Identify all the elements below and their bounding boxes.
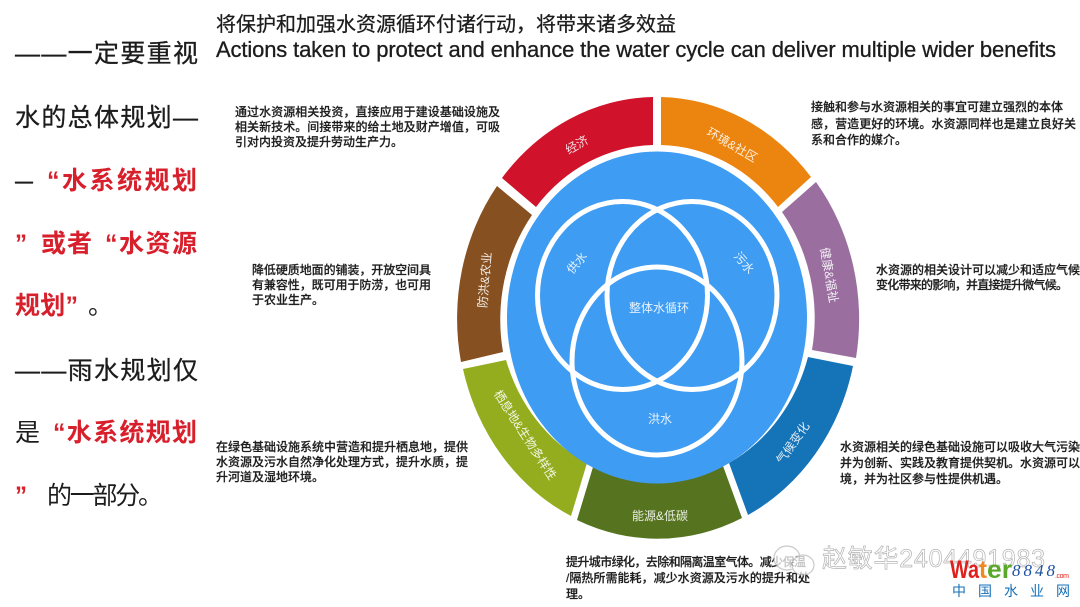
logo: water8848: t [979, 556, 988, 584]
text block: habitat and biodiversity: 在绿色基础设施系统中营造和提升栖息地，提供 [216, 439, 468, 454]
text block: habitat and biodiversity [216, 439, 468, 484]
text block: economy: 相关新技术。间接带来的给土地及财产增值，可吸 [235, 119, 500, 134]
watermark: wechat icon and account: 赵敏华2404491983 [822, 545, 1045, 573]
logo: water8848: 8848 [1012, 561, 1056, 580]
text block: health and wellbeing: 水资源的相关设计可以减少和适应气候 [876, 262, 1080, 277]
text block: economy: 引对内投资及提升劳动生产力。 [235, 134, 403, 149]
text block: health and wellbeing [876, 262, 1080, 292]
segment: flood and agriculture: 防洪&农业 [475, 251, 494, 309]
left text block: water system planning note: 水的总体规划— [15, 104, 198, 132]
left text block: water system planning note: 。 [88, 292, 113, 320]
left text block: water system planning note: ” [15, 230, 27, 258]
text block: economy [235, 104, 500, 149]
title [216, 13, 1056, 62]
left text block: water system planning note: 或者 [41, 230, 92, 258]
left text block: water system planning note: 规划” [15, 292, 78, 320]
segment: economy: 经济 [563, 132, 591, 157]
text block: energy and low carbon [566, 554, 810, 601]
logo: water8848: er [987, 556, 1012, 584]
logo: water8848: 中国水业网 [952, 583, 1070, 599]
centre label: 整体水循环 [629, 300, 689, 315]
segment: environment and community: 环境&社区 [704, 124, 760, 165]
segment: environment and community [661, 97, 811, 207]
segment: economy [502, 97, 653, 207]
venn circle: flooding [572, 267, 742, 455]
text block: flood and agriculture: 于农业生产。 [252, 293, 324, 307]
outer ring of benefits [457, 97, 859, 539]
text block: energy and low carbon: /隔热所需能耗，减少水资源及污水的提升和处 [566, 570, 810, 585]
text block: environment and community: 感，营造更好的环境。水资源同样也是建立良好关 [811, 116, 1076, 131]
segment: flood and agriculture [457, 186, 532, 362]
text block: flood and agriculture: 有兼容性，既可用于防涝，也可用 [252, 277, 431, 292]
segment: climate change [729, 357, 853, 515]
inner circle: integrated water cycle venn [507, 152, 807, 484]
text block: environment and community: 接触和参与水资源相关的事宜可建立强烈的本体 [811, 99, 1063, 114]
venn circle: flooding: 洪水 [648, 412, 672, 426]
logo: water8848 [950, 556, 1070, 599]
text block: environment and community: 系和合作的媒介。 [811, 132, 907, 147]
text block: flood and agriculture [252, 262, 431, 307]
text block: flood and agriculture: 降低硬质地面的铺装，开放空间具 [252, 262, 431, 277]
text block: habitat and biodiversity: 升河道及湿地环境。 [216, 469, 324, 484]
left text block: water system planning note: 的一部分。 [47, 482, 163, 510]
left text block: water system planning note: — [15, 167, 33, 195]
left text block: water system planning note: “水系统规划 [47, 167, 197, 195]
left text block: water system planning note: 是 [15, 419, 40, 447]
left text block: water system planning note: “水资源 [105, 230, 197, 258]
logo: water8848: Wa [950, 556, 980, 584]
title: Actions taken to protect and enhance the water cycle can deliver multiple wider benefits [216, 37, 1056, 62]
logo: water8848: .com [1055, 573, 1069, 580]
venn circle: wastewater: 污水 [731, 249, 757, 277]
text block: energy and low carbon: 提升城市绿化，去除和隔离温室气体。减少保温 [566, 554, 806, 569]
text block: climate change: 境，并为社区参与性提供机遇。 [840, 471, 1008, 486]
left text block: water system planning note: ” [15, 482, 27, 510]
text block: environment and community [811, 99, 1076, 147]
venn circle: water supply: 供水 [564, 249, 590, 277]
text block: health and wellbeing: 变化带来的影响，并直接提升微气候。 [876, 277, 1068, 292]
left text block: water system planning note: ——雨水规划仅 [15, 357, 198, 385]
segment: health and wellbeing: 健康&福祉 [817, 246, 842, 304]
venn circle: wastewater [607, 202, 777, 390]
text block: energy and low carbon: 理。 [566, 587, 590, 601]
text block: climate change [840, 439, 1080, 486]
left text block: water system planning note: “水系统规划 [53, 419, 197, 447]
segment: energy and low carbon: 能源&低碳 [632, 509, 688, 523]
venn circle: water supply [538, 202, 708, 390]
segment: climate change: 气候变化 [773, 419, 813, 467]
text block: climate change: 并为创新、实践及教育提供契机。水资源可以 [840, 455, 1080, 470]
text block: climate change: 水资源相关的绿色基础设施可以吸收大气污染 [840, 439, 1080, 454]
segment: health and wellbeing [782, 182, 859, 358]
left text block: water system planning note: ——一定要重视 [15, 40, 198, 68]
title: 将保护和加强水资源循环付诸行动，将带来诸多效益 [216, 13, 676, 36]
segment: habitat and biodiversity: 栖息地&生物多样性 [491, 387, 560, 482]
segment: energy and low carbon [577, 466, 742, 539]
text block: habitat and biodiversity: 水资源及污水自然净化处理方式，提升水质，提 [216, 454, 468, 469]
segment: habitat and biodiversity [463, 360, 587, 516]
text block: economy: 通过水资源相关投资，直接应用于建设基础设施及 [235, 104, 500, 119]
left text block: water system planning note [15, 40, 198, 510]
